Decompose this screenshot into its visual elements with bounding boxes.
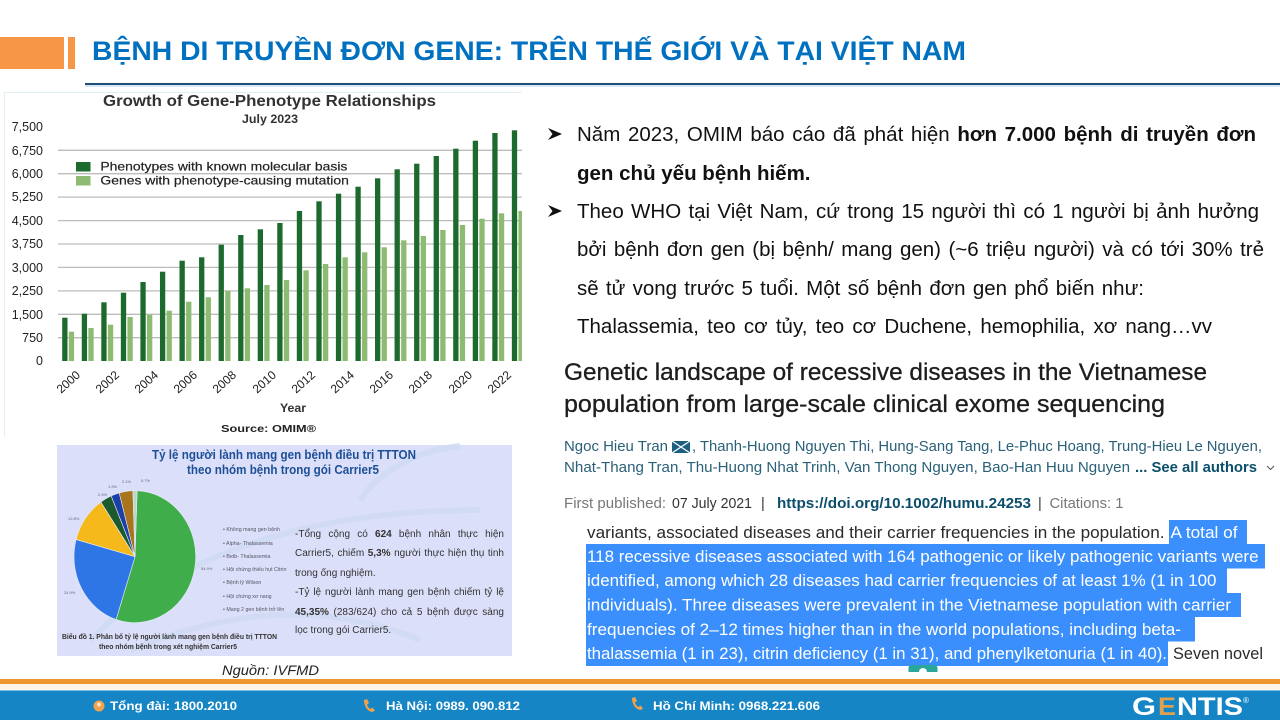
article publication info: | — [761, 496, 765, 512]
x axis labels: 2012 — [289, 368, 318, 396]
pie value labels: 24.9% — [64, 590, 76, 595]
abstract text: Seven novel — [1173, 645, 1263, 663]
article publication info: Citations: 1 — [1050, 496, 1124, 512]
article authors: , Thanh-Huong Nguyen Thi, Hung-Sang Tang, Le-Phuc Hoang, Trung-Hieu Le Nguyen, — [692, 438, 1262, 455]
article title: population from large-scale clinical exome sequencing — [564, 391, 1165, 418]
bullet 2: Thalassemia, teo cơ tủy, teo cơ Duchene, hemophilia, xơ nang…vv — [577, 315, 1212, 338]
bars: phenotypes with known molecular basis — [62, 130, 517, 361]
title: BỆNH DI TRUYỀN ĐƠN GENE: TRÊN THẾ GIỚI VÀ TẠI VIỆT NAM — [92, 35, 966, 66]
x axis labels: 2022 — [485, 368, 514, 396]
x axis labels: 2008 — [210, 368, 239, 396]
chart subtitle: July 2023 — [242, 112, 298, 126]
bullet 1: Năm 2023, OMIM báo cáo đã phát hiện hơn 7.000 bệnh di truyền đơn — [577, 123, 1256, 146]
article authors: ... See all authors — [1135, 459, 1257, 476]
chart title: Growth of Gene-Phenotype Relationships — [103, 93, 436, 110]
pie value labels: 54.9% — [201, 566, 213, 571]
x axis title: Year — [280, 401, 306, 415]
x axis labels: 2000 — [54, 368, 83, 396]
footer band — [0, 679, 1280, 720]
pie legend — [223, 527, 286, 613]
abstract text: frequencies of 2–12 times higher than in the world populations, including beta- — [587, 621, 1181, 639]
article publication info: First published: — [564, 496, 666, 512]
y axis labels: 750 — [22, 331, 43, 345]
y axis labels: 6,000 — [12, 167, 43, 181]
y axis labels: 4,500 — [12, 214, 43, 228]
footer contact: Ho Chi Minh: Hồ Chí Minh: 0968.221.606 — [653, 701, 820, 713]
abstract text: A total of — [1170, 524, 1238, 542]
pie legend: • Betb- Thalassemia — [223, 554, 270, 560]
footer contact: Ha Noi: Hà Nội: 0989. 090.812 — [386, 701, 520, 713]
article publication info: 07 July 2021 — [672, 496, 752, 512]
abstract text: thalassemia (1 in 23), citrin deficiency (1 in 31), and phenylketonuria (1 in 40). — [587, 645, 1167, 663]
pie value labels: 1.9% — [108, 484, 118, 489]
legend — [76, 160, 349, 187]
pie legend: • Bệnh lý Wilson — [223, 580, 261, 586]
slide text: Carrier5, chiếm 5,3% người thực hiện thụ tinh — [295, 548, 504, 559]
bullet 1: gen chủ yếu bệnh hiếm. — [577, 162, 811, 185]
article publication info: https://doi.org/10.1002/humu.24253 — [777, 496, 1031, 512]
chart source: Source: OMIM® — [221, 424, 317, 435]
panel: Carrier5 slide photo — [57, 445, 512, 656]
slide text — [295, 528, 504, 640]
x axis labels: 2010 — [250, 368, 279, 396]
legend: Phenotypes with known molecular basis — [100, 160, 347, 174]
y axis labels: 0 — [36, 354, 43, 368]
slide text: trong ống nghiệm. — [295, 568, 376, 579]
article authors: Nhat-Thang Tran, Thu-Huong Nhat Trinh, Van Thong Nguyen, Bao-Han Huu Nguyen — [564, 459, 1130, 476]
y axis labels: 6,750 — [12, 144, 43, 158]
pie caption: Biểu đồ 1. Phân bổ tỷ lệ người lành mang gen bệnh điều trị TTTON — [62, 632, 277, 641]
footer contact: Ha Noi — [364, 699, 520, 713]
panel: gene-phenotype growth chart — [4, 92, 522, 437]
x axis labels: 2002 — [93, 368, 122, 396]
source note: Nguồn: IVFMD — [222, 662, 319, 678]
header accent blocks — [0, 37, 75, 69]
slide heading: Tỷ lệ người lành mang gen bệnh điều trị TTTON — [152, 448, 416, 462]
footer contact: Ho Chi Minh — [632, 697, 820, 713]
abstract text: variants, associated diseases and their carrier frequencies in the population. — [587, 524, 1164, 542]
pie value labels: 2.4% — [98, 492, 108, 497]
x axis labels: 2006 — [171, 368, 200, 396]
pie caption — [62, 632, 277, 651]
x axis labels: 2016 — [367, 368, 396, 396]
article title: Genetic landscape of recessive diseases in the Vietnamese — [564, 359, 1207, 386]
abstract text: 118 recessive diseases associated with 164 pathogenic or likely pathogenic variants were — [587, 548, 1258, 566]
logo: GENTIS — [1132, 693, 1249, 720]
abstract text: individuals). Three diseases were prevalent in the Vietnamese population with carrier — [587, 596, 1232, 614]
x axis labels: 2014 — [328, 368, 357, 396]
y axis labels: 1,500 — [12, 308, 43, 322]
pie legend: • Alpha- Thalassemia — [223, 541, 273, 547]
pie legend: • Mang 2 gen bệnh trở lên — [223, 606, 284, 613]
pie legend: • Hội chứng thiếu hụt Citrin — [223, 567, 286, 573]
y axis labels — [12, 120, 43, 368]
pie chart — [74, 491, 196, 623]
article publication info: | — [1038, 496, 1042, 512]
slide heading: theo nhóm bệnh trong gói Carrier5 — [187, 463, 379, 477]
pie value labels: 12.8% — [68, 516, 80, 521]
highlighted abstract selection — [586, 520, 1265, 666]
bullet 2: Theo WHO tại Việt Nam, cứ trong 15 người thì có 1 người bị ảnh hưởng — [577, 200, 1259, 223]
bullet 1 — [548, 123, 1256, 190]
bullet 2: sẽ tử vong trước 5 tuổi. Một số bệnh đơn gen phổ biến như: — [577, 277, 1144, 300]
pie value labels: 0.7% — [141, 478, 151, 483]
pie legend: • Hội chứng xơ nang — [223, 594, 272, 600]
article authors: Ngoc Hieu Tran — [564, 438, 668, 455]
slide heading — [152, 448, 416, 477]
x axis labels: 2004 — [132, 368, 161, 396]
footer contact: hotline: Tổng đài: 1800.2010 — [110, 701, 237, 713]
abstract text: identified, among which 28 diseases had carrier frequencies of at least 1% (1 in 100 — [587, 572, 1216, 590]
slide text: -Tổng cộng có 624 bệnh nhân thực hiện — [295, 529, 504, 540]
y axis labels: 3,000 — [12, 261, 43, 275]
pie value labels: 2.1% — [122, 479, 132, 484]
panel: journal article screenshot — [564, 359, 1274, 672]
bars: genes with phenotype-causing mutation — [69, 211, 522, 361]
article title — [564, 359, 1207, 418]
article publication info — [564, 496, 1124, 512]
x axis labels — [54, 368, 514, 396]
y axis labels: 3,750 — [12, 237, 43, 251]
x axis labels: 2018 — [406, 368, 435, 396]
slide text: lọc trong gói Carrier5. — [295, 625, 391, 636]
pie legend: • Không mang gen bệnh — [223, 527, 280, 533]
abstract text — [587, 524, 1263, 663]
y axis labels: 2,250 — [12, 284, 43, 298]
slide text: -Tỷ lệ người lành mang gen bệnh chiếm tỷ lệ — [295, 587, 504, 598]
icon: teal chat badge — [908, 665, 938, 672]
bullet 2: bởi bệnh đơn gen (bị bệnh/ mang gen) (~6 triệu người) và có tới 30% trẻ — [577, 238, 1264, 261]
pie value labels — [64, 478, 213, 595]
icon: envelope — [672, 441, 690, 453]
pie caption: theo nhóm bệnh trong xét nghiệm Carrier5 — [99, 642, 237, 651]
y axis labels: 5,250 — [12, 190, 43, 204]
y axis labels: 7,500 — [12, 120, 43, 134]
article authors — [564, 438, 1274, 476]
legend: Genes with phenotype-causing mutation — [100, 173, 349, 187]
bullet list — [548, 123, 1264, 343]
slide text: 45,35% (283/624) cho cả 5 bệnh được sàng — [295, 607, 504, 618]
bullet 2 — [548, 200, 1264, 343]
logo: GENTIS: ® — [1243, 696, 1249, 705]
x axis labels: 2020 — [446, 368, 475, 396]
